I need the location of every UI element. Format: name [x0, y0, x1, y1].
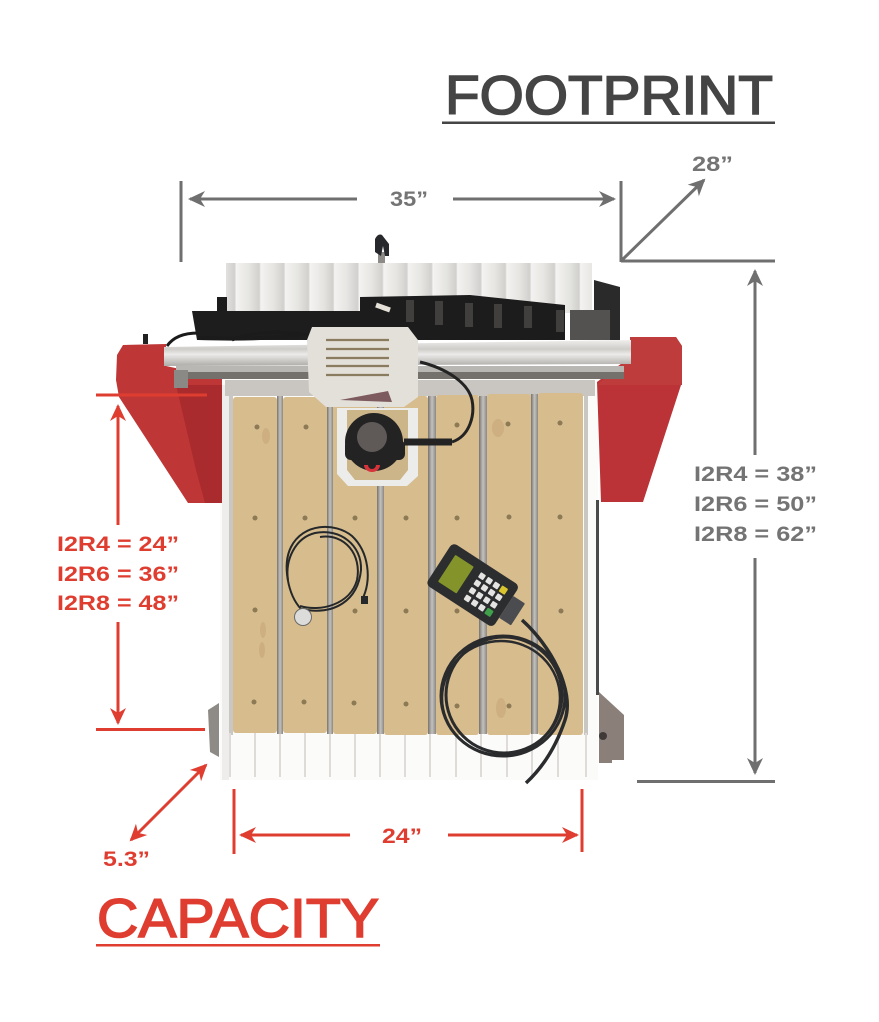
left cables — [143, 332, 310, 346]
T-slots — [277, 394, 538, 734]
spindle head cover — [307, 327, 418, 407]
capacity length labels — [57, 533, 179, 615]
footprint length labels — [694, 463, 817, 546]
rear connector — [375, 234, 389, 263]
right foot block — [599, 692, 624, 763]
touch probe puck — [294, 608, 312, 626]
footprint length labels: I2R8 = 62” — [694, 523, 817, 546]
capacity width dimension: 24 inches — [234, 789, 582, 854]
capacity length labels: I2R4 = 24” — [57, 533, 179, 556]
green key — [484, 608, 494, 617]
router mount plate — [337, 408, 418, 486]
right red side plate — [597, 337, 682, 502]
cable chain — [360, 295, 565, 340]
capacity width dimension: 24 inches: 24” — [382, 825, 422, 848]
yellow key — [499, 585, 508, 595]
capacity length labels: I2R8 = 48” — [57, 592, 179, 615]
spindle cord — [404, 362, 473, 442]
footprint width dimension: 35 inches — [181, 181, 621, 262]
keypad — [463, 572, 508, 617]
DSP handheld pendant — [426, 542, 532, 635]
router mount opening — [347, 410, 408, 480]
heading: CAPACITY: CAPACITY — [97, 887, 379, 949]
footprint width dimension: 35 inches: 35” — [390, 188, 428, 211]
capacity length labels: I2R6 = 36” — [57, 563, 179, 586]
footprint length labels: I2R6 = 50” — [694, 493, 817, 516]
pendant cable — [441, 620, 567, 783]
footprint depth dimension: 28 inches — [621, 153, 775, 261]
board stains — [259, 419, 506, 718]
left foot block — [208, 703, 219, 757]
heading: FOOTPRINT: FOOTPRINT — [445, 64, 773, 126]
footprint length dimension — [637, 271, 817, 782]
footprint length labels: I2R4 = 38” — [694, 463, 817, 486]
capacity height dimension: 5.3 inches — [103, 765, 206, 871]
footprint depth dimension: 28 inches: 28” — [692, 153, 733, 176]
gantry beam — [164, 340, 631, 388]
rear black frame — [192, 280, 620, 340]
serial connector — [499, 596, 525, 625]
bed frame — [220, 378, 598, 780]
capacity height dimension: 5.3 inches: 5.3” — [103, 848, 150, 871]
lower rail stripes — [230, 733, 586, 777]
touch probe cable — [287, 527, 368, 611]
frame side shading — [222, 380, 599, 780]
left red side plate — [116, 344, 222, 503]
rear rail — [226, 263, 592, 313]
board screws — [252, 420, 564, 708]
router body — [345, 413, 405, 472]
MDF boards — [233, 393, 583, 735]
capacity length dimension — [57, 395, 207, 730]
machine photo illustration — [116, 234, 682, 783]
